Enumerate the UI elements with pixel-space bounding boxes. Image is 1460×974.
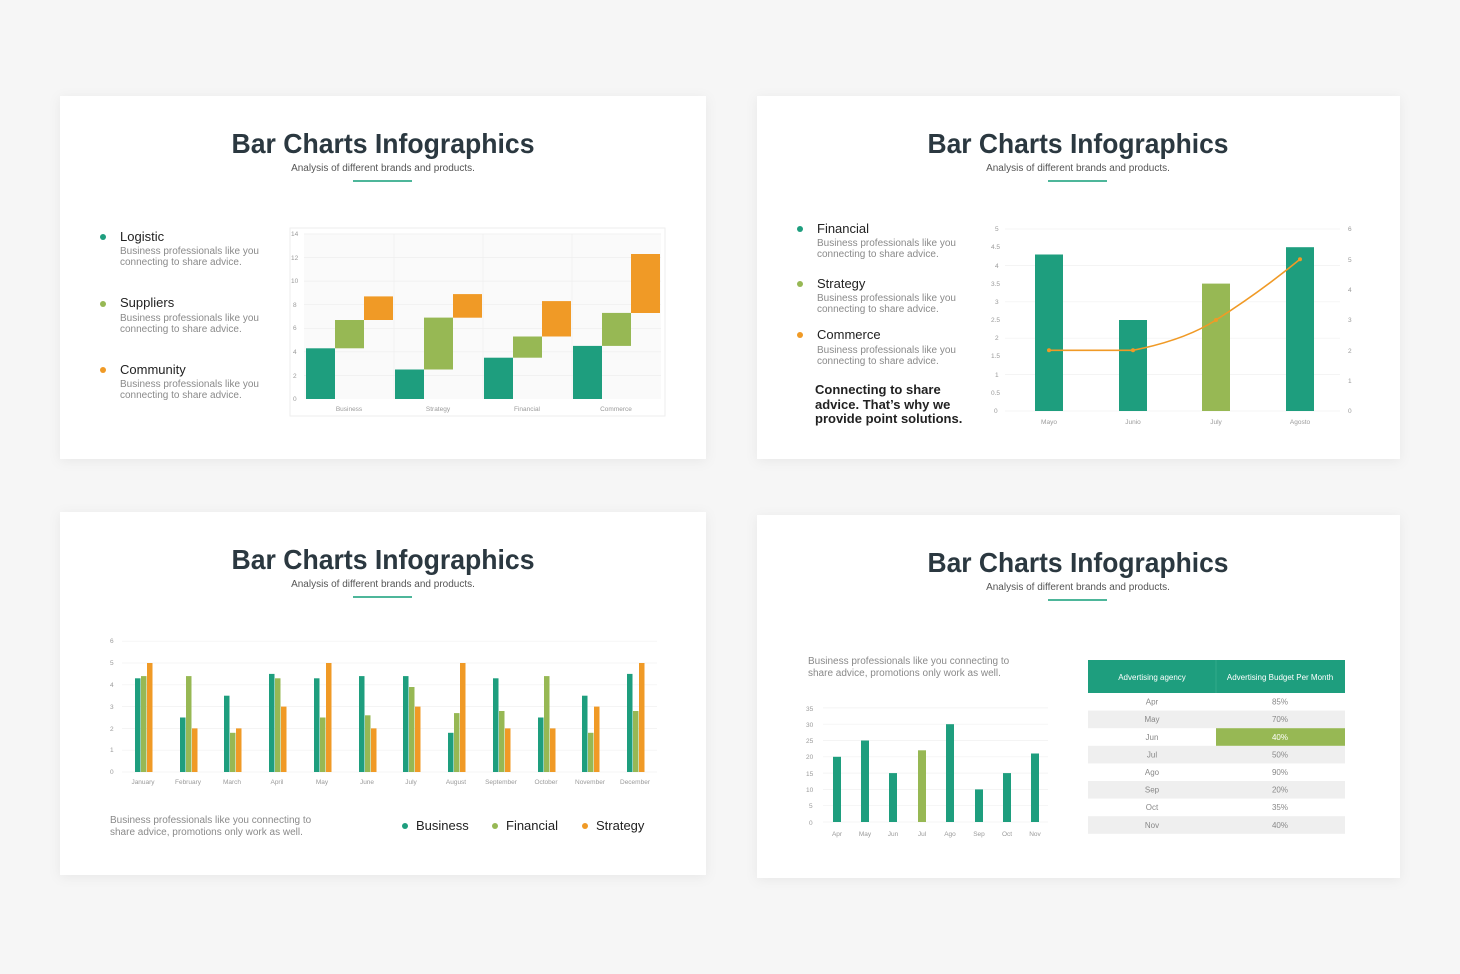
bar chart: monthly: Jun bbox=[888, 831, 899, 838]
chart: bars with line bbox=[991, 226, 1352, 426]
table: advertising budget: Jul bbox=[1147, 750, 1157, 759]
bar chart: grouped: 0 bbox=[110, 769, 114, 776]
bar chart: grouped: 1 bbox=[110, 747, 114, 754]
text block bbox=[808, 656, 1010, 679]
callout text: Connecting to share bbox=[815, 382, 941, 397]
chart: bars with line: 5 bbox=[995, 226, 999, 233]
legend list: Business professionals like you bbox=[120, 379, 259, 390]
bar chart: grouped: 6 bbox=[110, 638, 114, 645]
chart: bars with line: 0.5 bbox=[991, 390, 1000, 397]
bar chart: grouped: December bbox=[620, 779, 651, 786]
bar chart: monthly: Sep bbox=[973, 831, 985, 838]
legend list: connecting to share advice. bbox=[817, 249, 939, 260]
bar chart: grouped: 5 bbox=[110, 660, 114, 667]
title bbox=[928, 128, 1228, 182]
table: advertising budget: 40% bbox=[1272, 733, 1288, 742]
legend list bbox=[797, 221, 956, 367]
callout text bbox=[815, 382, 962, 426]
table: advertising budget: 35% bbox=[1272, 803, 1288, 812]
bar chart: waterfall: 10 bbox=[291, 278, 299, 285]
chart: bars with line: 2 bbox=[1348, 348, 1352, 355]
bar chart: waterfall: 6 bbox=[293, 325, 297, 332]
callout text: advice. That’s why we bbox=[815, 397, 950, 412]
legend: Business bbox=[416, 818, 469, 833]
table: advertising budget: Nov bbox=[1145, 821, 1159, 830]
chart: bars with line: 1 bbox=[995, 372, 999, 379]
table: advertising budget: 85% bbox=[1272, 698, 1288, 707]
title: Analysis of different brands and products. bbox=[291, 163, 475, 174]
title bbox=[232, 128, 534, 182]
title: Bar Charts Infographics bbox=[232, 544, 534, 575]
legend: Financial bbox=[506, 818, 558, 833]
legend list: Business professionals like you bbox=[817, 238, 956, 249]
bar chart: grouped: 3 bbox=[110, 704, 114, 711]
chart: bars with line: 6 bbox=[1348, 226, 1352, 233]
title: Analysis of different brands and products. bbox=[986, 582, 1170, 593]
chart: bars with line: Mayo bbox=[1041, 419, 1057, 426]
title bbox=[232, 544, 534, 598]
chart: bars with line: 4 bbox=[995, 263, 999, 270]
table: advertising budget: Jun bbox=[1146, 733, 1158, 742]
bar chart: monthly: 5 bbox=[809, 803, 813, 810]
legend list: connecting to share advice. bbox=[120, 390, 242, 401]
bar chart: waterfall: 12 bbox=[291, 255, 299, 262]
panel: grouped monthly bar chart bbox=[60, 512, 706, 875]
table: advertising budget: 50% bbox=[1272, 750, 1288, 759]
bar chart: monthly: 0 bbox=[809, 820, 813, 827]
bar chart: waterfall: Business bbox=[336, 406, 363, 413]
chart: bars with line: 3 bbox=[995, 299, 999, 306]
bar chart: grouped bbox=[110, 638, 657, 786]
legend list: Business professionals like you bbox=[817, 293, 956, 304]
chart: bars with line: July bbox=[1210, 419, 1223, 426]
title: Bar Charts Infographics bbox=[232, 128, 534, 159]
text block: share advice, promotions only work as well. bbox=[110, 827, 303, 838]
chart: bars with line: 2.5 bbox=[991, 317, 1000, 324]
chart: bars with line: Agosto bbox=[1290, 419, 1310, 426]
legend list: Community bbox=[120, 362, 186, 377]
bar chart: monthly: 30 bbox=[806, 722, 814, 729]
bar chart: monthly: 20 bbox=[806, 754, 814, 761]
chart: bars with line: 3 bbox=[1348, 317, 1352, 324]
bar chart: waterfall: 4 bbox=[293, 349, 297, 356]
panel: bar and line combo chart bbox=[757, 96, 1400, 459]
chart: bars with line: 1 bbox=[1348, 378, 1352, 385]
bar chart: grouped: March bbox=[223, 779, 241, 786]
legend list: connecting to share advice. bbox=[120, 324, 242, 335]
bar chart: grouped: August bbox=[446, 779, 466, 786]
table: advertising budget: Advertising agency bbox=[1118, 673, 1186, 682]
bar chart: monthly: Jul bbox=[918, 831, 927, 838]
bar chart: grouped: October bbox=[534, 779, 558, 786]
bar chart: grouped: September bbox=[485, 779, 518, 786]
legend list: Logistic bbox=[120, 229, 165, 244]
table: advertising budget: 20% bbox=[1272, 786, 1288, 795]
chart: bars with line: 0 bbox=[1348, 408, 1352, 415]
chart: bars with line: Junio bbox=[1125, 419, 1141, 426]
bar chart: monthly bbox=[806, 706, 1048, 838]
legend: Strategy bbox=[596, 818, 645, 833]
bar chart: grouped: July bbox=[405, 779, 418, 786]
bar chart: monthly: Oct bbox=[1002, 831, 1012, 838]
callout text: provide point solutions. bbox=[815, 411, 962, 426]
table: advertising budget: 40% bbox=[1272, 821, 1288, 830]
table: advertising budget: May bbox=[1144, 715, 1160, 724]
bar chart: waterfall: 0 bbox=[293, 396, 297, 403]
title: Analysis of different brands and products. bbox=[291, 579, 475, 590]
legend list: Business professionals like you bbox=[817, 345, 956, 356]
bar chart: waterfall: 14 bbox=[291, 231, 299, 238]
table: advertising budget: 70% bbox=[1272, 715, 1288, 724]
bar chart: grouped: May bbox=[316, 779, 329, 786]
table: advertising budget: Advertising Budget Per Month bbox=[1227, 673, 1333, 682]
bar chart: monthly: Ago bbox=[944, 831, 956, 838]
text block: Business professionals like you connecting to bbox=[110, 815, 312, 826]
bar chart: grouped: 4 bbox=[110, 682, 114, 689]
chart: bars with line: 4 bbox=[1348, 287, 1352, 294]
legend bbox=[402, 818, 645, 833]
bar chart: monthly: May bbox=[859, 831, 872, 838]
chart: bars with line: 3.5 bbox=[991, 281, 1000, 288]
legend list: Strategy bbox=[817, 276, 866, 291]
bar chart: waterfall: Financial bbox=[514, 406, 541, 413]
panel: bar chart with table bbox=[757, 515, 1400, 878]
legend list: Suppliers bbox=[120, 295, 175, 310]
legend list: connecting to share advice. bbox=[817, 356, 939, 367]
bar chart: grouped: 2 bbox=[110, 726, 114, 733]
legend list: connecting to share advice. bbox=[817, 304, 939, 315]
bar chart: monthly: Nov bbox=[1029, 831, 1042, 838]
table: advertising budget: Oct bbox=[1146, 803, 1159, 812]
title: Bar Charts Infographics bbox=[928, 547, 1228, 578]
legend list: Financial bbox=[817, 221, 869, 236]
bar chart: grouped: February bbox=[175, 779, 202, 786]
panel: stacked waterfall chart bbox=[60, 96, 706, 459]
bar chart: monthly: 15 bbox=[806, 771, 814, 778]
text block: Business professionals like you connecting to bbox=[808, 656, 1010, 667]
legend list: Business professionals like you bbox=[120, 313, 259, 324]
bar chart: monthly: 25 bbox=[806, 738, 814, 745]
bar chart: monthly: 10 bbox=[806, 787, 814, 794]
chart: bars with line: 5 bbox=[1348, 257, 1352, 264]
text block: share advice, promotions only work as well. bbox=[808, 668, 1001, 679]
bar chart: waterfall: Commerce bbox=[600, 406, 632, 413]
chart: bars with line: 4.5 bbox=[991, 244, 1000, 251]
title bbox=[928, 547, 1228, 601]
title: Bar Charts Infographics bbox=[928, 128, 1228, 159]
text block bbox=[110, 815, 312, 838]
legend list bbox=[100, 229, 259, 401]
bar chart: waterfall: 2 bbox=[293, 373, 297, 380]
table: advertising budget: Ago bbox=[1145, 768, 1160, 777]
bar chart: grouped: April bbox=[270, 779, 284, 786]
table: advertising budget: Apr bbox=[1146, 698, 1159, 707]
chart: bars with line: 2 bbox=[995, 335, 999, 342]
legend list: Commerce bbox=[817, 327, 881, 342]
bar chart: grouped: January bbox=[131, 779, 155, 786]
bar chart: waterfall: 8 bbox=[293, 302, 297, 309]
chart: bars with line: 1.5 bbox=[991, 353, 1000, 360]
legend list: connecting to share advice. bbox=[120, 257, 242, 268]
table: advertising budget bbox=[1088, 660, 1345, 834]
bar chart: monthly: Apr bbox=[832, 831, 843, 838]
title: Analysis of different brands and products. bbox=[986, 163, 1170, 174]
legend list: Business professionals like you bbox=[120, 246, 259, 257]
bar chart: grouped: November bbox=[575, 779, 606, 786]
table: advertising budget: Sep bbox=[1145, 786, 1160, 795]
chart: bars with line: 0 bbox=[994, 408, 998, 415]
table: advertising budget: 90% bbox=[1272, 768, 1288, 777]
bar chart: waterfall: Strategy bbox=[426, 406, 451, 413]
bar chart: monthly: 35 bbox=[806, 706, 814, 713]
bar chart: waterfall bbox=[290, 228, 665, 416]
bar chart: grouped: June bbox=[360, 779, 374, 786]
